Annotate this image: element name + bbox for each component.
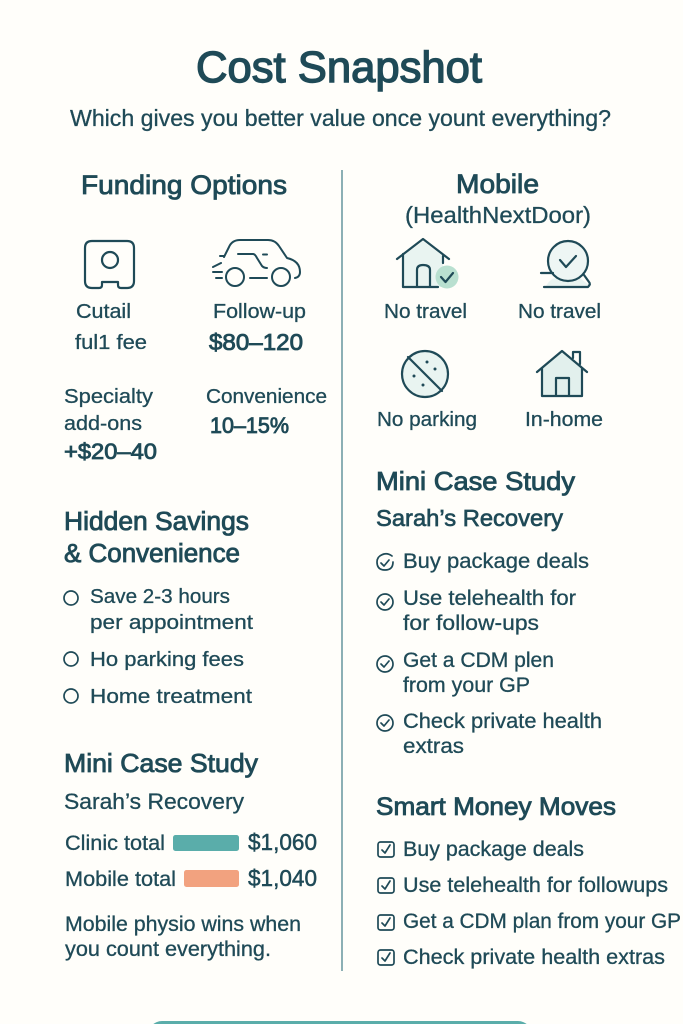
heading: hidden savings: Hidden Savings [64,508,249,536]
bar chart: cost comparison [65,829,317,891]
list item: get a cdm plan [377,648,554,697]
checklist item: cdm plan: Get a CDM plan from your GP [403,910,681,933]
list item: use telehealth: for follow-ups [403,611,539,635]
bottom button [148,1021,532,1024]
heading: smart money moves: Smart Money Moves [376,793,616,821]
label: no travel second: No travel [518,300,601,323]
label: in-home: In-home [525,408,603,431]
list item: check private health: Check private health [403,709,602,733]
label: follow-up price: $80–120 [209,329,303,355]
panel: funding options [64,170,327,464]
list item: get a cdm plan: Get a CDM plen [403,648,554,672]
list item: check private health: extras [403,734,464,758]
list item: parking fees: Ho parking fees [90,648,244,671]
heading: mobile [405,169,591,228]
icon: magnifier check [541,241,590,287]
checklist item: private extras: Check private health extras [403,946,665,969]
icon: no parking [402,351,448,397]
heading: hidden savings: & Convenience [64,540,240,568]
list item: buy package deals: Buy package deals [403,549,589,573]
icon: car [213,240,300,286]
subtitle: Which gives you better value once yount everything? [70,105,611,131]
title: Cost Snapshot [196,43,482,92]
label: convenience: Convenience [206,385,327,408]
panel: mini case study left [64,748,317,961]
label: convenience [206,385,327,438]
list item: home treatment: Home treatment [90,685,252,708]
icon: card [85,241,134,288]
checklist item: telehealth: Use telehealth for followups [403,874,668,897]
list item: get a cdm plan: from your GP [403,673,530,697]
row: clinic total: $1,060 [248,829,317,855]
label: cutail full fee: ful1 fee [75,331,147,354]
heading: mini case study: Mini Case Study [64,748,258,778]
row: mobile total [65,865,317,891]
label: follow-up price: Follow-up [213,300,306,323]
panel: mini case study right [376,466,602,758]
checklist item: package deals: Buy package deals [403,838,584,861]
label: cutail full fee: Cutail [76,300,131,323]
row: clinic total: Clinic total [65,832,165,855]
conclusion text: you count everything. [65,938,271,961]
subheading: sarah's recovery: Sarah’s Recovery [64,789,244,814]
heading: mobile: (HealthNextDoor) [405,202,591,228]
panel: smart money moves [376,793,681,969]
list item: check private health [377,709,602,758]
icon: house with check [397,239,458,288]
row: mobile total: Mobile total [65,868,176,891]
heading: mobile: Mobile [456,169,539,199]
subheading: sarah's recovery: Sarah’s Recovery [376,505,564,531]
icon: home [537,351,587,396]
label: specialty add-ons: Specialty [64,385,154,408]
label: specialty add-ons [64,385,157,464]
heading: funding options: Funding Options [81,170,287,200]
list item: save hours: per appointment [90,611,253,634]
label: specialty add-ons: +$20–40 [64,439,157,464]
label: no travel: No travel [384,300,467,323]
label: cutail full fee [75,300,147,354]
label: specialty add-ons: add-ons [64,412,142,435]
conclusion text: Mobile physio wins when [65,913,301,936]
label: follow-up price [209,300,306,355]
list item: use telehealth: Use telehealth for [403,586,576,610]
list item: save hours [64,585,253,634]
label: no parking: No parking [377,408,477,431]
row: clinic total [65,829,317,855]
heading: mini case study: Mini Case Study [376,466,575,496]
row: mobile total: $1,040 [248,865,317,891]
list item: use telehealth [377,586,576,635]
label: convenience: 10–15% [210,413,289,438]
conclusion text [65,913,301,961]
panel: mobile [377,169,603,431]
list item: save hours: Save 2-3 hours [90,585,230,608]
panel: hidden savings [64,508,253,708]
heading: hidden savings [64,508,249,568]
